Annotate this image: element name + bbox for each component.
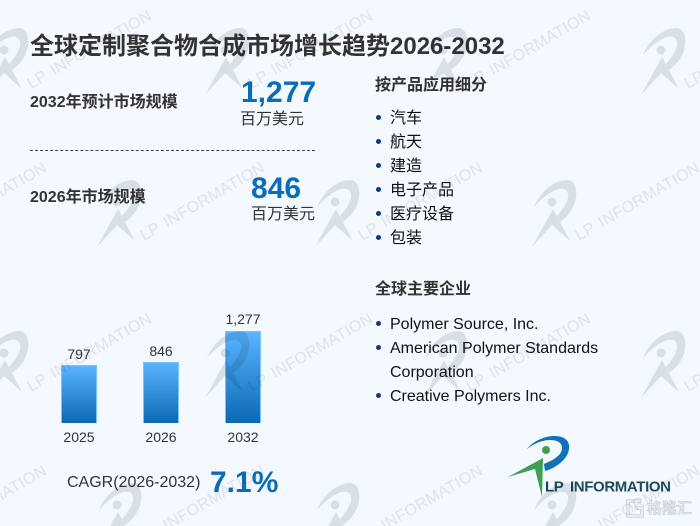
bar 2025: 797 <box>67 346 91 362</box>
bar 2026 <box>143 343 179 445</box>
title: 全球定制聚合物合成市场增长趋势2026-2032 <box>30 33 505 60</box>
heading: segments: 按产品应用细分 <box>375 77 487 94</box>
list: segments: 汽车 <box>390 110 422 127</box>
stat label 2032: 2032年预计市场规模 <box>30 94 178 111</box>
logo: LP Information: LP INFORMATION <box>545 478 671 496</box>
watermark icon G <box>626 499 644 518</box>
stat: 2032 market size <box>30 76 316 128</box>
background watermark pattern: LP INFORMATION <box>356 159 486 244</box>
background watermark pattern: LP INFORMATION <box>464 7 594 92</box>
bar 2026: 2026 <box>145 429 177 445</box>
bar 2032: 1,277 <box>225 311 261 327</box>
background watermark pattern: LP INFORMATION <box>246 7 376 92</box>
stat: 2026 market size <box>30 172 315 223</box>
bar 2026: 846 <box>149 343 173 359</box>
stat value 846: 846 <box>251 172 301 205</box>
background watermark pattern: LP INFORMATION <box>24 310 155 395</box>
background watermark pattern: LP INFORMATION <box>572 159 700 244</box>
watermark text: 格隆汇 <box>647 500 692 517</box>
background watermark pattern: LP INFORMATION <box>246 310 376 395</box>
stat value 1,277: 1,277 <box>241 76 316 109</box>
bar 2032: 2032 <box>227 429 259 445</box>
stat unit 2026: 百万美元 <box>251 206 315 223</box>
list: segments: 电子产品 <box>390 182 454 199</box>
background watermark pattern: LP INFORMATION <box>138 159 268 244</box>
bar 2025: 2025 <box>63 429 95 445</box>
stat unit 2032: 百万美元 <box>240 111 304 128</box>
watermark: Gelonghui <box>626 499 692 518</box>
bar 2025 <box>61 346 97 445</box>
list: segments: 航天 <box>390 134 422 151</box>
list: companies: Polymer Source, Inc. <box>390 316 538 333</box>
CAGR value: 7.1% <box>210 466 278 499</box>
logo: LP Information <box>508 436 671 497</box>
CAGR label: CAGR(2026-2032) <box>67 474 200 491</box>
list: companies <box>376 316 598 405</box>
CAGR callout <box>67 466 278 499</box>
heading: companies: 全球主要企业 <box>375 281 471 298</box>
list: segments: 医疗设备 <box>390 206 454 223</box>
background watermark pattern: LP INFORMATION <box>24 7 155 92</box>
list: companies: American Polymer Standards Corporation <box>390 340 598 381</box>
list: companies: Creative Polymers Inc. <box>390 388 551 405</box>
stat label 2026: 2026年市场规模 <box>30 189 146 206</box>
list: segments: 包装 <box>390 230 422 247</box>
background watermark pattern: LP INFORMATION <box>464 310 594 395</box>
bar chart <box>61 311 261 445</box>
bar 2032 <box>225 311 261 445</box>
list: segments <box>376 109 454 247</box>
list: segments: 建造 <box>390 158 422 175</box>
